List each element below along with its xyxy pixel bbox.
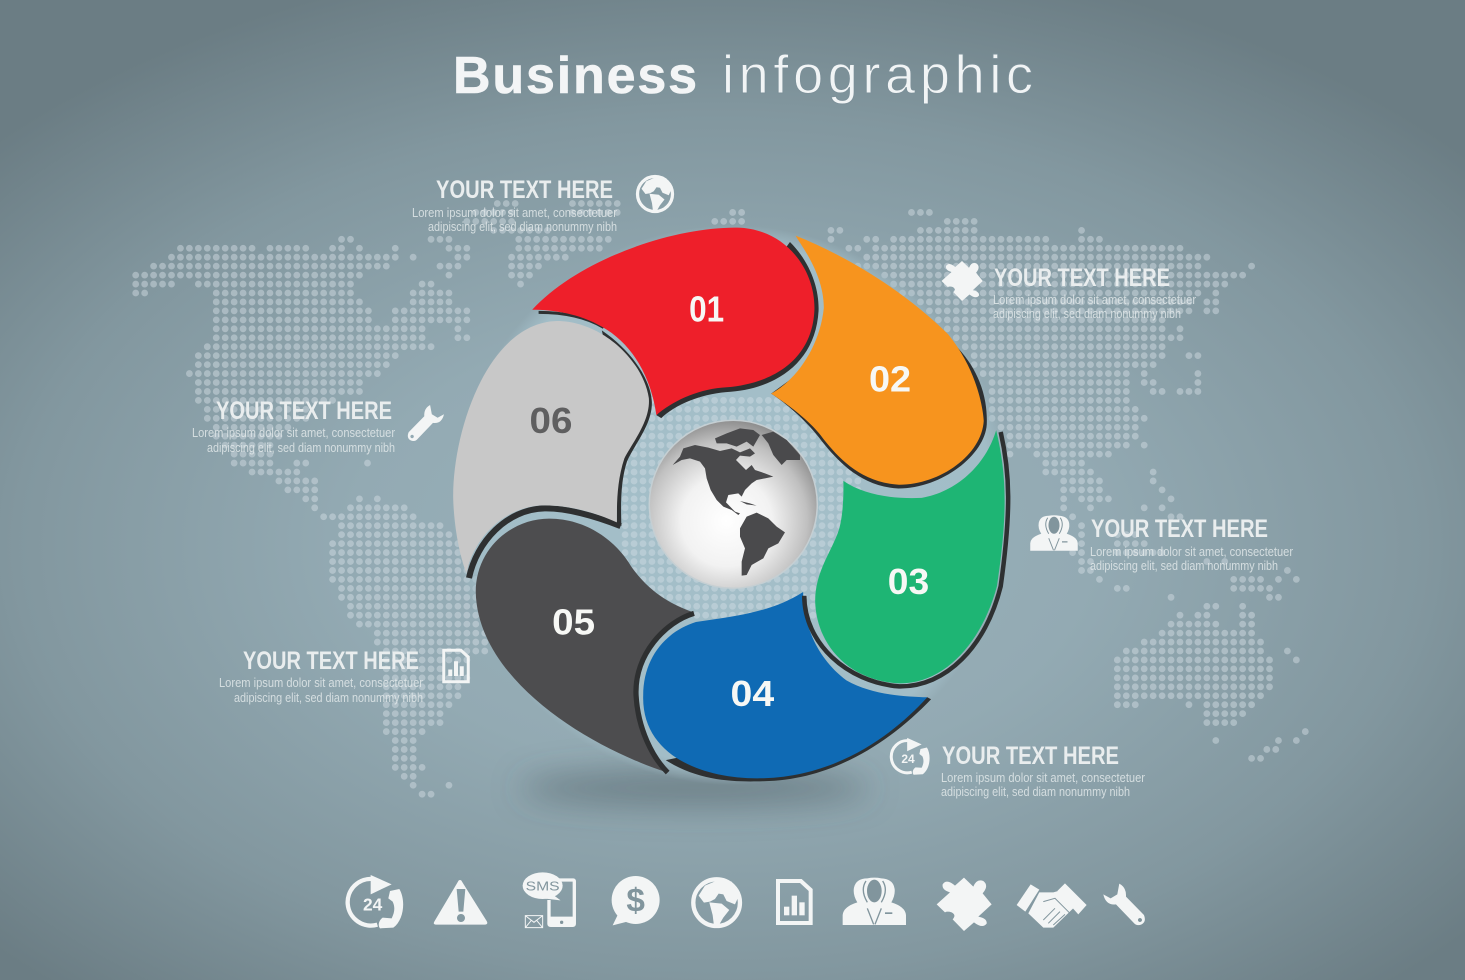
icon: business person bbox=[843, 878, 906, 925]
callout 01: text and globe icon: adipiscing elit, sed diam nonummy nibh bbox=[428, 219, 617, 234]
icon: sms and mobile: SMS bbox=[526, 879, 560, 893]
callout 02: text and puzzle icon: YOUR TEXT HERE bbox=[994, 264, 1170, 292]
callout 05: text and document icon: adipiscing elit, sed diam nonummy nibh bbox=[234, 690, 423, 705]
callout 03: text and person icon: YOUR TEXT HERE bbox=[1091, 515, 1268, 543]
icon: puzzle piece bbox=[937, 878, 992, 931]
segment 05 dark: 05 bbox=[552, 601, 595, 642]
callout 04: text and 24h icon: 24 bbox=[901, 752, 915, 766]
ring backdrop disc bbox=[452, 225, 1012, 785]
callout 01: text and globe icon: YOUR TEXT HERE bbox=[436, 176, 613, 204]
callout 03: text and person icon: Lorem ipsum dolor sit amet, consectetuer bbox=[1090, 544, 1294, 559]
dotted world map bbox=[136, 204, 1305, 794]
icon: wrench bbox=[1103, 884, 1145, 925]
segment 06 grey: 06 bbox=[530, 400, 572, 441]
segment 06 grey bbox=[453, 321, 652, 578]
callout 06: text and wrench icon: YOUR TEXT HERE bbox=[216, 397, 392, 425]
callout 01: text and globe icon bbox=[412, 176, 672, 234]
ground shadow bbox=[520, 770, 870, 806]
title: Business bbox=[453, 47, 697, 105]
icon: 24 hour phone bbox=[348, 875, 403, 928]
central map dots bbox=[625, 400, 867, 615]
icon: globe bbox=[693, 879, 740, 926]
segment 04 blue: 04 bbox=[731, 673, 774, 714]
callout 02: text and puzzle icon: Lorem ipsum dolor sit amet, consectetuer bbox=[993, 292, 1197, 307]
title: infographic bbox=[722, 45, 1033, 105]
callout 04: text and 24h icon bbox=[891, 738, 1146, 799]
icon: sms and mobile bbox=[523, 872, 576, 928]
icon: handshake bbox=[1017, 883, 1087, 928]
icon: dollar speech bubble bbox=[612, 876, 660, 925]
segment 01 red bbox=[532, 228, 819, 418]
icon: document chart bbox=[776, 879, 813, 925]
segment 01 red: 01 bbox=[689, 288, 724, 329]
callout 02: text and puzzle icon: adipiscing elit, sed diam nonummy nibh bbox=[993, 306, 1181, 321]
segment 03 green bbox=[804, 430, 1008, 686]
callout 06: text and wrench icon: adipiscing elit, sed diam nonummy nibh bbox=[207, 440, 395, 455]
callout 04: text and 24h icon: Lorem ipsum dolor sit amet, consectetuer bbox=[941, 770, 1146, 785]
icon: warning bbox=[434, 880, 487, 925]
icon: dollar speech bubble: $ bbox=[626, 883, 645, 920]
callout 05: text and document icon bbox=[219, 647, 470, 705]
callout 03: text and person icon: adipiscing elit, sed diam nonummy nibh bbox=[1090, 558, 1278, 573]
callout 02: text and puzzle icon bbox=[942, 261, 1197, 321]
callout 05: text and document icon: YOUR TEXT HERE bbox=[243, 647, 419, 675]
callout 06: text and wrench icon: Lorem ipsum dolor sit amet, consectetuer bbox=[192, 425, 396, 440]
title bbox=[453, 45, 1033, 105]
callout 03: text and person icon bbox=[1030, 515, 1294, 573]
callout 04: text and 24h icon: adipiscing elit, sed diam nonummy nibh bbox=[941, 784, 1130, 799]
segment 05 dark bbox=[476, 519, 694, 773]
segmented ring bbox=[453, 228, 1008, 781]
segment 03 green: 03 bbox=[888, 561, 929, 602]
callout 05: text and document icon: Lorem ipsum dolor sit amet, consectetuer bbox=[219, 675, 424, 690]
bottom icon row bbox=[348, 872, 1145, 931]
segment 02 orange bbox=[771, 236, 987, 488]
callout 06: text and wrench icon bbox=[192, 397, 444, 455]
icon: 24 hour phone: 24 bbox=[363, 895, 383, 915]
callout 01: text and globe icon: Lorem ipsum dolor sit amet, consectetuer bbox=[412, 205, 618, 220]
segment 02 orange: 02 bbox=[869, 358, 911, 399]
callout 04: text and 24h icon: YOUR TEXT HERE bbox=[942, 742, 1119, 770]
centre globe bbox=[649, 420, 817, 588]
segment 04 blue bbox=[643, 592, 931, 781]
